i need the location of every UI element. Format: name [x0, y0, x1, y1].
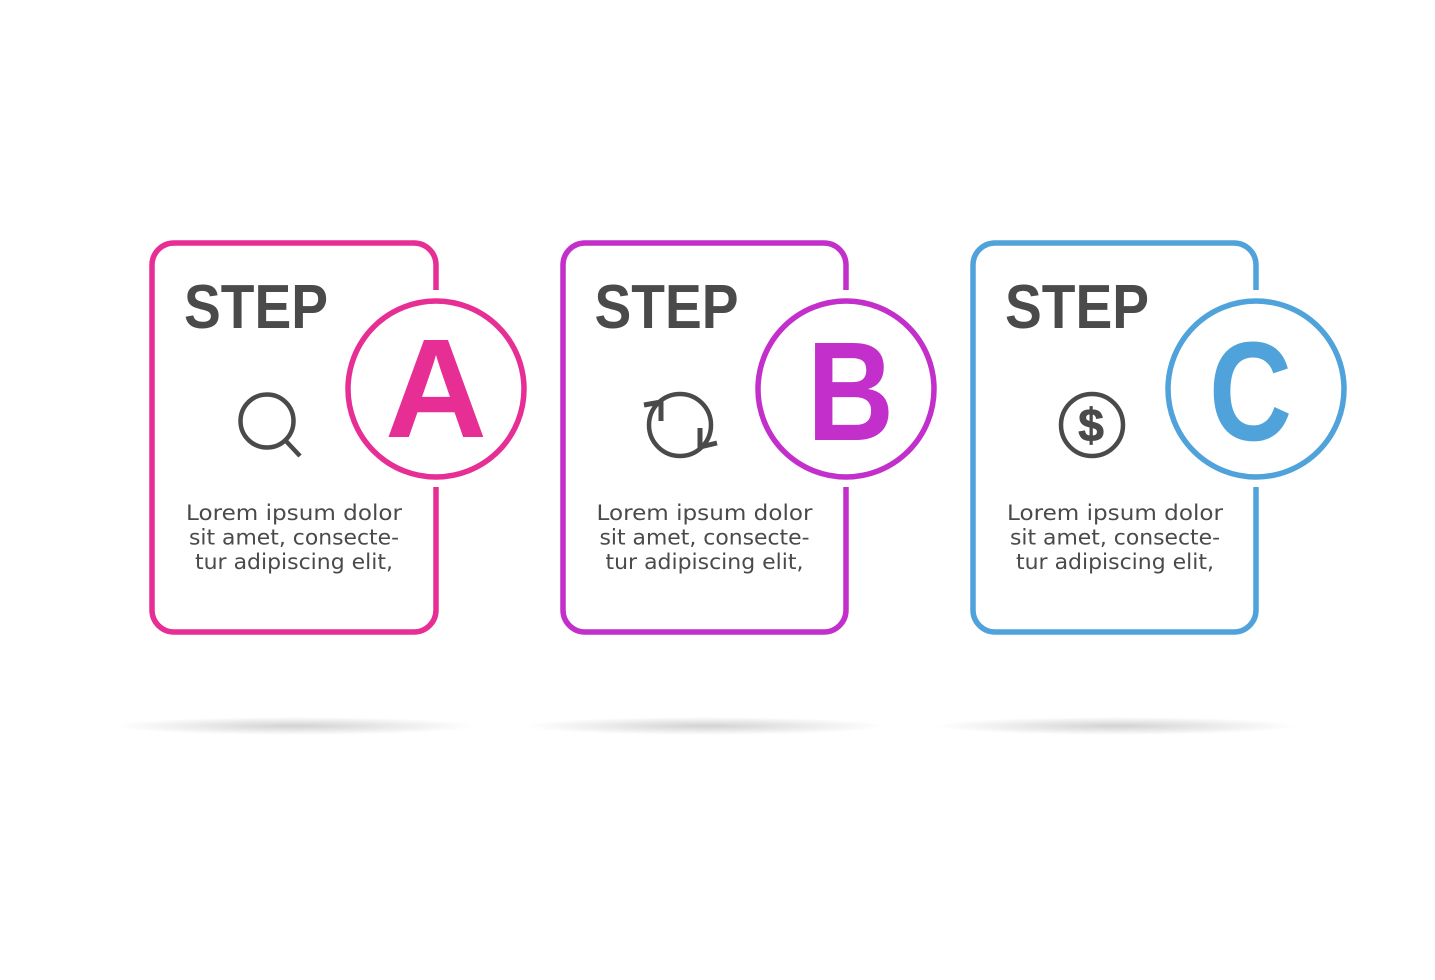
badge letter C: C	[1209, 312, 1292, 470]
badge letter B: B	[807, 312, 894, 470]
text block A: Lorem ipsum dolor	[186, 501, 402, 526]
card outline A	[152, 243, 436, 632]
panel: step C	[973, 243, 1344, 632]
text block A	[186, 501, 402, 575]
card outline C	[973, 243, 1256, 632]
shadow under step B	[525, 717, 885, 735]
heading A: STEP	[184, 273, 328, 342]
text block B: sit amet, consecte-	[600, 526, 810, 550]
badge letter A: A	[385, 309, 487, 467]
shadow under step A	[115, 717, 475, 735]
text block A: sit amet, consecte-	[189, 526, 399, 550]
heading C: STEP	[1005, 273, 1149, 342]
heading B: STEP	[594, 273, 738, 342]
card outline B	[563, 243, 846, 632]
badge circle C	[1168, 301, 1344, 477]
icon: dollar coin	[1061, 394, 1123, 456]
text block C: tur adipiscing elit,	[1016, 550, 1214, 575]
badge circle A	[348, 301, 524, 477]
icon: refresh arrows	[644, 394, 717, 456]
text block A: tur adipiscing elit,	[195, 550, 393, 575]
text block C: Lorem ipsum dolor	[1007, 501, 1223, 526]
text block C: sit amet, consecte-	[1010, 526, 1220, 550]
panel: step A	[152, 243, 524, 632]
shadow under step C	[936, 717, 1296, 735]
icon: dollar coin: $	[1078, 399, 1104, 451]
panel: step B	[563, 243, 934, 632]
text block B: tur adipiscing elit,	[606, 550, 804, 575]
text block B	[596, 501, 813, 575]
icon: magnifier	[240, 394, 300, 456]
text block C	[1007, 501, 1223, 575]
badge circle B	[758, 301, 934, 477]
text block B: Lorem ipsum dolor	[596, 501, 813, 526]
